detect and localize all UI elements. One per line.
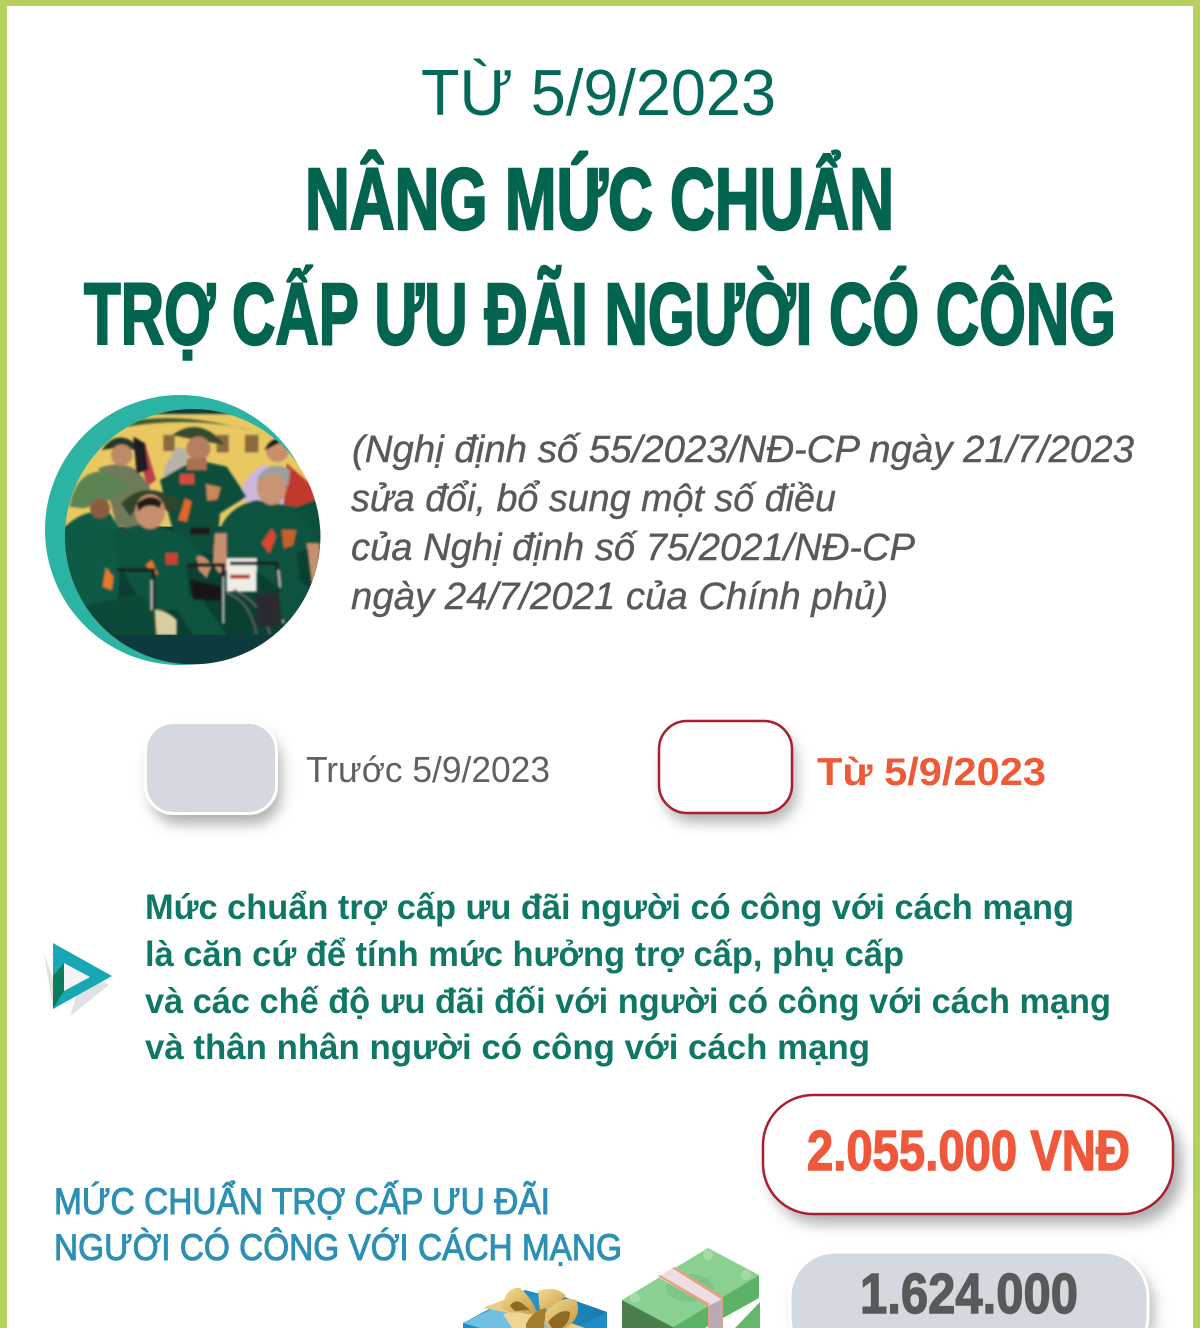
title [84, 151, 1116, 363]
description line 1: Mức chuẩn trợ cấp ưu đãi người có công với cách mạng [145, 888, 1074, 927]
legend: from [659, 721, 1046, 822]
legend: before: Trước 5/9/2023 [306, 749, 550, 790]
title line 1: NÂNG MỨC CHUẨN [305, 151, 894, 248]
description text [145, 888, 1111, 1067]
citation line 4: ngày 24/7/2021 của Chính phủ) [351, 576, 888, 618]
icon: gift box [463, 1288, 607, 1328]
legend: before [146, 722, 550, 824]
icon: stack of money [622, 1248, 760, 1328]
legend: from: Từ 5/9/2023 [817, 751, 1046, 794]
citation line 1: (Nghị định số 55/2023/NĐ-CP ngày 21/7/2023 [352, 429, 1134, 471]
citation text [351, 429, 1134, 618]
value box: new amount [763, 1095, 1182, 1224]
value box: old amount [790, 1252, 1154, 1328]
value box: old amount: 1.624.000 [860, 1262, 1078, 1326]
description line 2: là căn cứ để tính mức hưởng trợ cấp, phụ cấp [145, 935, 904, 974]
value box: new amount: 2.055.000 VNĐ [807, 1119, 1130, 1183]
citation line 3: của Nghị định số 75/2021/NĐ-CP [351, 527, 916, 569]
citation line 2: sửa đổi, bổ sung một số điều [351, 478, 836, 520]
description line 4: và thân nhân người có công với cách mạng [145, 1028, 870, 1067]
icon: play triangle [44, 943, 112, 1016]
title date line: TỪ 5/9/2023 [421, 56, 776, 129]
photo: veterans in wheelchairs [45, 395, 323, 668]
description line 3: và các chế độ ưu đãi đối với người có công với cách mạng [145, 982, 1111, 1021]
subheading line 1: MỨC CHUẨN TRỢ CẤP ƯU ĐÃI [54, 1180, 550, 1222]
subheading [54, 1180, 622, 1268]
subheading line 2: NGƯỜI CÓ CÔNG VỚI CÁCH MẠNG [54, 1227, 622, 1268]
